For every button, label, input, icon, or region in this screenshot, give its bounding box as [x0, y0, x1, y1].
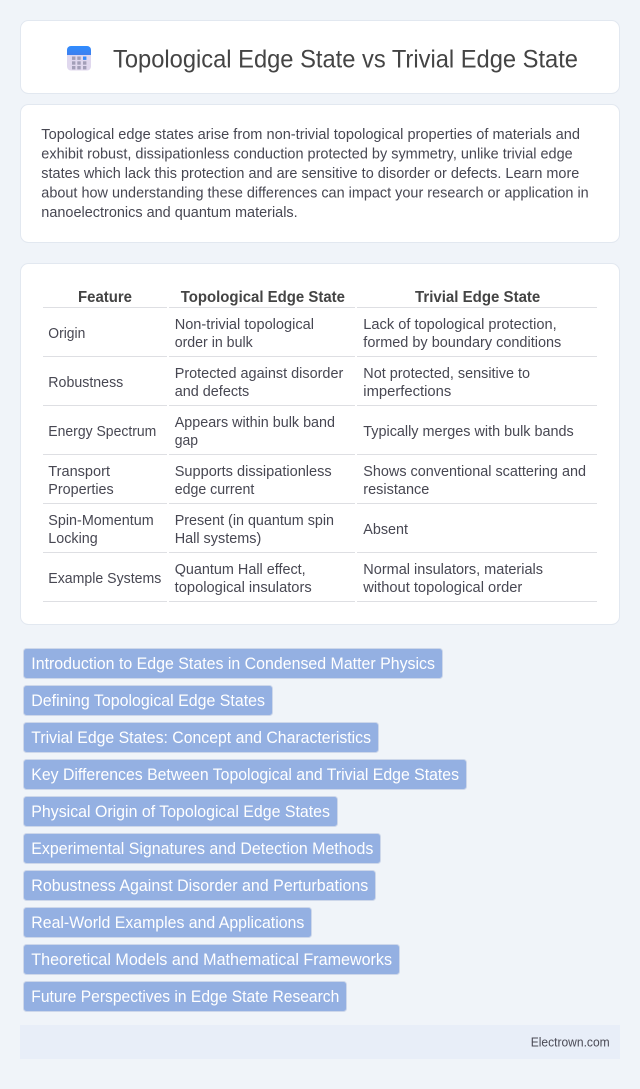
table header row: Feature [78, 289, 132, 306]
table row: transport properties: edge current [175, 482, 254, 498]
table row: example systems: Normal insulators, materials [363, 562, 543, 578]
table row: robustness: Protected against disorder [175, 366, 343, 382]
footer: Electrown.com [531, 1034, 610, 1050]
table row: spin-momentum locking: Present (in quantum spin [175, 513, 334, 529]
tag: robustness [24, 870, 376, 900]
tag: experimental signatures: Experimental Signatures and Detection Methods [31, 840, 373, 858]
table row: origin: Origin [48, 326, 85, 342]
table row: example systems: Quantum Hall effect, [175, 562, 306, 578]
table row: transport properties: Transport [48, 464, 110, 480]
table row: energy spectrum: Typically merges with bulk bands [363, 424, 574, 440]
panel: comparison table [20, 264, 620, 624]
table header row: Topological Edge State [181, 289, 345, 306]
tag: real-world examples [24, 908, 312, 938]
table row: robustness [43, 366, 597, 406]
tag: theoretical models [24, 944, 400, 974]
table row: example systems: topological insulators [175, 580, 312, 596]
tag: real-world examples: Real-World Examples and Applications [31, 914, 304, 932]
panel: title header [20, 20, 620, 94]
panel: introduction [20, 104, 620, 242]
table row: transport properties: resistance [363, 482, 429, 498]
tag: trivial edge states: Trivial Edge States: Concept and Characteristics [31, 729, 371, 747]
table row: origin: order in bulk [175, 335, 253, 351]
text block: introduction paragraph: exhibit robust, dissipationless conduction protected by symmetry, unlike trivial edge [41, 146, 573, 162]
table header row [43, 289, 597, 308]
table row: energy spectrum: gap [175, 433, 198, 449]
table row: spin-momentum locking: Hall systems) [175, 531, 261, 547]
tag: robustness: Robustness Against Disorder and Perturbations [31, 877, 368, 895]
table row: energy spectrum: Appears within bulk band [175, 415, 335, 431]
text block: introduction paragraph: states which lack this protection and are sensitive to disorder or defects. Learn more [41, 166, 579, 182]
tag: future perspectives: Future Perspectives in Edge State Research [31, 988, 339, 1006]
tag: theoretical models: Theoretical Models and Mathematical Frameworks [31, 951, 392, 969]
tag: physical origin [24, 796, 338, 826]
footer [20, 1025, 620, 1059]
text block: introduction paragraph [41, 127, 589, 221]
table row: example systems [43, 562, 597, 602]
text block: introduction paragraph: about how understanding these differences can impact your research or application in [41, 186, 589, 202]
table row: robustness: imperfections [363, 384, 451, 400]
tag: defining topological edge states: Defining Topological Edge States [31, 692, 265, 710]
tag: key differences: Key Differences Between Topological and Trivial Edge States [31, 766, 459, 784]
table row: transport properties: Shows conventional scattering and [363, 464, 586, 480]
tag: physical origin: Physical Origin of Topological Edge States [31, 803, 330, 821]
tag: introduction: Introduction to Edge States in Condensed Matter Physics [31, 655, 435, 673]
table row: origin: formed by boundary conditions [363, 335, 561, 351]
table row: transport properties: Supports dissipationless [175, 464, 332, 480]
list of section tags [24, 648, 466, 1012]
table row: spin-momentum locking [43, 513, 597, 553]
text block: introduction paragraph: Topological edge states arise from non-trivial topological properties of materials and [41, 127, 580, 143]
table row: transport properties [43, 464, 597, 504]
table row: origin: Lack of topological protection, [363, 317, 557, 333]
tag: future perspectives [24, 982, 346, 1012]
icon: calendar grid [67, 46, 91, 70]
tag: defining topological edge states [24, 686, 272, 716]
table row: robustness: and defects [175, 384, 249, 400]
text block: introduction paragraph: nanoelectronics and quantum materials. [41, 205, 298, 221]
tag: introduction [24, 648, 442, 678]
table row: example systems: Example Systems [48, 571, 161, 587]
table row: energy spectrum [43, 415, 597, 455]
tag: trivial edge states [24, 722, 378, 752]
tag: experimental signatures [24, 834, 380, 864]
table row: spin-momentum locking: Spin-Momentum [48, 513, 154, 529]
table row: robustness: Not protected, sensitive to [363, 366, 530, 382]
title: Topological Edge State vs Trivial Edge State [113, 46, 578, 74]
table row: spin-momentum locking: Absent [363, 522, 408, 538]
table row: example systems: without topological order [362, 580, 522, 596]
table header row: Trivial Edge State [415, 289, 540, 306]
tag: key differences [24, 760, 466, 790]
table row: transport properties: Properties [48, 482, 114, 498]
table row: origin: Non-trivial topological [175, 317, 314, 333]
table row: spin-momentum locking: Locking [48, 531, 98, 547]
table row: origin [43, 317, 597, 357]
table row: robustness: Robustness [48, 375, 123, 391]
table row: energy spectrum: Energy Spectrum [48, 424, 156, 440]
